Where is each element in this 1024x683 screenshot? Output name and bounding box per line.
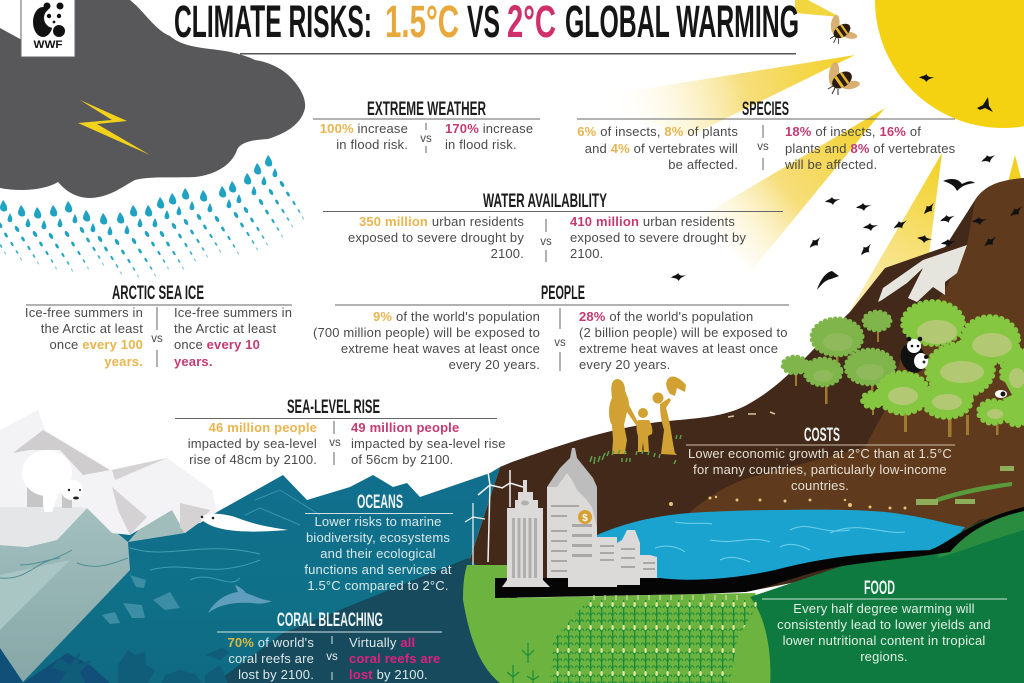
panel: extreme weather: [313, 99, 540, 153]
panel: food: regions.: [860, 649, 908, 664]
panel: coral bleaching: lost by 2100.: [238, 667, 314, 682]
panel: arctic sea ice: once every 10: [174, 337, 260, 352]
panel: species: be affected.: [668, 157, 738, 172]
panel: species: SPECIES: [742, 99, 789, 120]
sun rays: [575, 0, 1021, 314]
icon: birds flock: [671, 73, 1024, 290]
panel: sea-level rise: 49 million people: [351, 420, 459, 435]
seabed: [0, 648, 110, 683]
panel: people: vs: [554, 337, 566, 349]
panel: costs: countries.: [791, 478, 849, 493]
panel: extreme weather: EXTREME WEATHER: [367, 99, 486, 120]
coral silhouettes: [52, 648, 230, 683]
deep water shadow: [215, 558, 520, 683]
panel: coral bleaching: [217, 610, 442, 682]
panda mark: [33, 2, 65, 37]
lake: [597, 510, 965, 582]
panel: oceans: biodiversity, ecosystems: [306, 530, 450, 545]
panel: arctic sea ice: years.: [174, 354, 213, 369]
panel: arctic sea ice: ARCTIC SEA ICE: [112, 283, 204, 304]
panel: people: 9% of the world's population: [373, 309, 540, 324]
panel: species: 6% of insects, 8% of plants: [577, 124, 738, 139]
panel: coral bleaching: 70% of world's: [227, 635, 314, 650]
panel: oceans: [304, 492, 453, 593]
panel: arctic sea ice: [25, 283, 292, 369]
wave lines: [130, 548, 260, 582]
panel: oceans: functions and services at: [304, 562, 452, 577]
panel: arctic sea ice: vs: [151, 333, 163, 345]
panel: sea-level rise: [175, 397, 506, 467]
panel: sea-level rise: of 56cm by 2100.: [351, 452, 453, 467]
main tower: [547, 448, 597, 530]
icon: panda in tree: [897, 337, 1007, 398]
panel: coral bleaching: CORAL BLEACHING: [277, 610, 383, 631]
left building: [502, 480, 550, 587]
panel: people: [313, 283, 789, 372]
panel: costs: for many countries, particularly low-income: [693, 462, 947, 477]
panel: coral bleaching: coral reefs are: [349, 651, 440, 666]
panel: food: Every half degree warming will: [793, 601, 975, 616]
panel: extreme weather: 100% increase: [320, 121, 408, 136]
panel: arctic sea ice: once every 100: [50, 337, 143, 352]
icon: bees: [827, 14, 861, 95]
panel: oceans: OCEANS: [357, 492, 403, 513]
panel: sea-level rise: SEA-LEVEL RISE: [287, 397, 380, 418]
black shoreline: [495, 507, 1024, 598]
panel: sea-level rise: impacted by sea-level: [188, 436, 317, 451]
panel: oceans: 1.5°C compared to 2°C.: [307, 578, 449, 593]
logo: WWF panda: WWF: [34, 39, 63, 51]
light green field: [463, 565, 770, 683]
panel: arctic sea ice: Ice-free summers in: [174, 305, 292, 320]
panel: people: every 20 years.: [579, 357, 670, 372]
icon: polar bear: [22, 450, 83, 512]
panel: species: plants and 8% of vertebrates: [785, 141, 956, 156]
panel: water availability: exposed to severe drought by: [348, 230, 524, 245]
dark green field: [750, 507, 1024, 683]
panel: arctic sea ice: Ice-free summers in: [25, 305, 143, 320]
panel: food: [762, 578, 1007, 664]
panel: people: extreme heat waves at least once: [579, 341, 778, 356]
duller left trees: [783, 312, 894, 385]
submerged iceberg: [0, 508, 185, 682]
bright main canopy: [863, 302, 1024, 425]
coin icon: [578, 510, 592, 524]
panel: water availability: 2100.: [570, 246, 603, 261]
panel: species: will be affected.: [784, 157, 877, 172]
panel: food: FOOD: [864, 578, 895, 599]
panel: people: (2 billion people) will be exposed to: [579, 325, 788, 340]
logo: WWF panda: [21, 0, 75, 57]
panel: extreme weather: in flood risk.: [445, 137, 517, 152]
panel: costs: Lower economic growth at 2°C than at 1.5°C: [688, 446, 952, 461]
panel: people: PEOPLE: [541, 283, 585, 304]
panel: extreme weather: in flood risk.: [336, 137, 408, 152]
trees: [783, 302, 1024, 437]
panel: arctic sea ice: the Arctic at least: [174, 321, 276, 336]
icon: dolphin and fish: [102, 575, 272, 624]
panel: food: consistently lead to lower yields and: [777, 617, 991, 632]
panel: people: every 20 years.: [449, 357, 540, 372]
panel: water availability: exposed to severe drought by: [570, 230, 746, 245]
panel: arctic sea ice: the Arctic at least: [41, 321, 143, 336]
panel: extreme weather: vs: [420, 133, 432, 145]
wind turbines: [465, 470, 523, 565]
city skyline: $: [582, 513, 588, 524]
panel: people: 28% of the world's population: [579, 309, 753, 324]
panel: oceans: and their ecological: [320, 546, 436, 561]
panel: sea-level rise: rise of 48cm by 2100.: [189, 452, 317, 467]
panel: coral bleaching: Virtually all: [349, 635, 415, 650]
panel: species: [577, 99, 956, 172]
icon: family silhouette: [609, 377, 686, 455]
mountain and brown hillside: [468, 178, 1024, 592]
iceberg: [0, 410, 217, 547]
panel: water availability: 350 million urban residents: [359, 214, 524, 229]
title: [174, 0, 799, 47]
storm cloud: [0, 0, 305, 198]
city skyline: [502, 448, 657, 587]
panel: food: lower nutritional content in tropical: [783, 633, 985, 648]
panel: people: (700 million people) will be exposed to: [313, 325, 540, 340]
panel: water availability: WATER AVAILABILITY: [483, 191, 607, 212]
panel: people: extreme heat waves at least once: [341, 341, 540, 356]
grass tufts under family: [590, 435, 681, 464]
panel: species: and 4% of vertebrates will: [585, 141, 738, 156]
panel: extreme weather: 170% increase: [445, 121, 533, 136]
panel: water availability: 410 million urban residents: [570, 214, 735, 229]
panel: water availability: 2100.: [491, 246, 524, 261]
sun: [875, 0, 1024, 128]
panel: water availability: [323, 191, 783, 262]
low buildings: [597, 530, 657, 587]
panel: oceans: Lower risks to marine: [314, 514, 442, 529]
panel: coral bleaching: coral reefs are: [228, 651, 314, 666]
title rule: [240, 53, 796, 54]
panel: species: 18% of insects, 16% of: [785, 124, 921, 139]
ground specks and grass: [669, 412, 1014, 510]
panel: water availability: vs: [540, 236, 552, 248]
panel: sea-level rise: vs: [329, 437, 341, 449]
panel: costs: COSTS: [804, 425, 840, 446]
storm rain: [0, 155, 304, 278]
icon: lightning bolt: [78, 100, 150, 155]
panel: arctic sea ice: years.: [104, 354, 143, 369]
ocean: [0, 467, 520, 683]
panel: coral bleaching: vs: [326, 651, 338, 663]
panel: coral bleaching: lost by 2100.: [349, 667, 428, 682]
panel: sea-level rise: impacted by sea-level rise: [351, 436, 506, 451]
snow cap: [878, 245, 967, 302]
panel: sea-level rise: 46 million people: [209, 420, 317, 435]
corn field: [507, 595, 761, 683]
panel: species: vs: [757, 141, 769, 153]
icon: seal on ice floe: [200, 514, 288, 532]
panel: costs: [686, 425, 955, 493]
